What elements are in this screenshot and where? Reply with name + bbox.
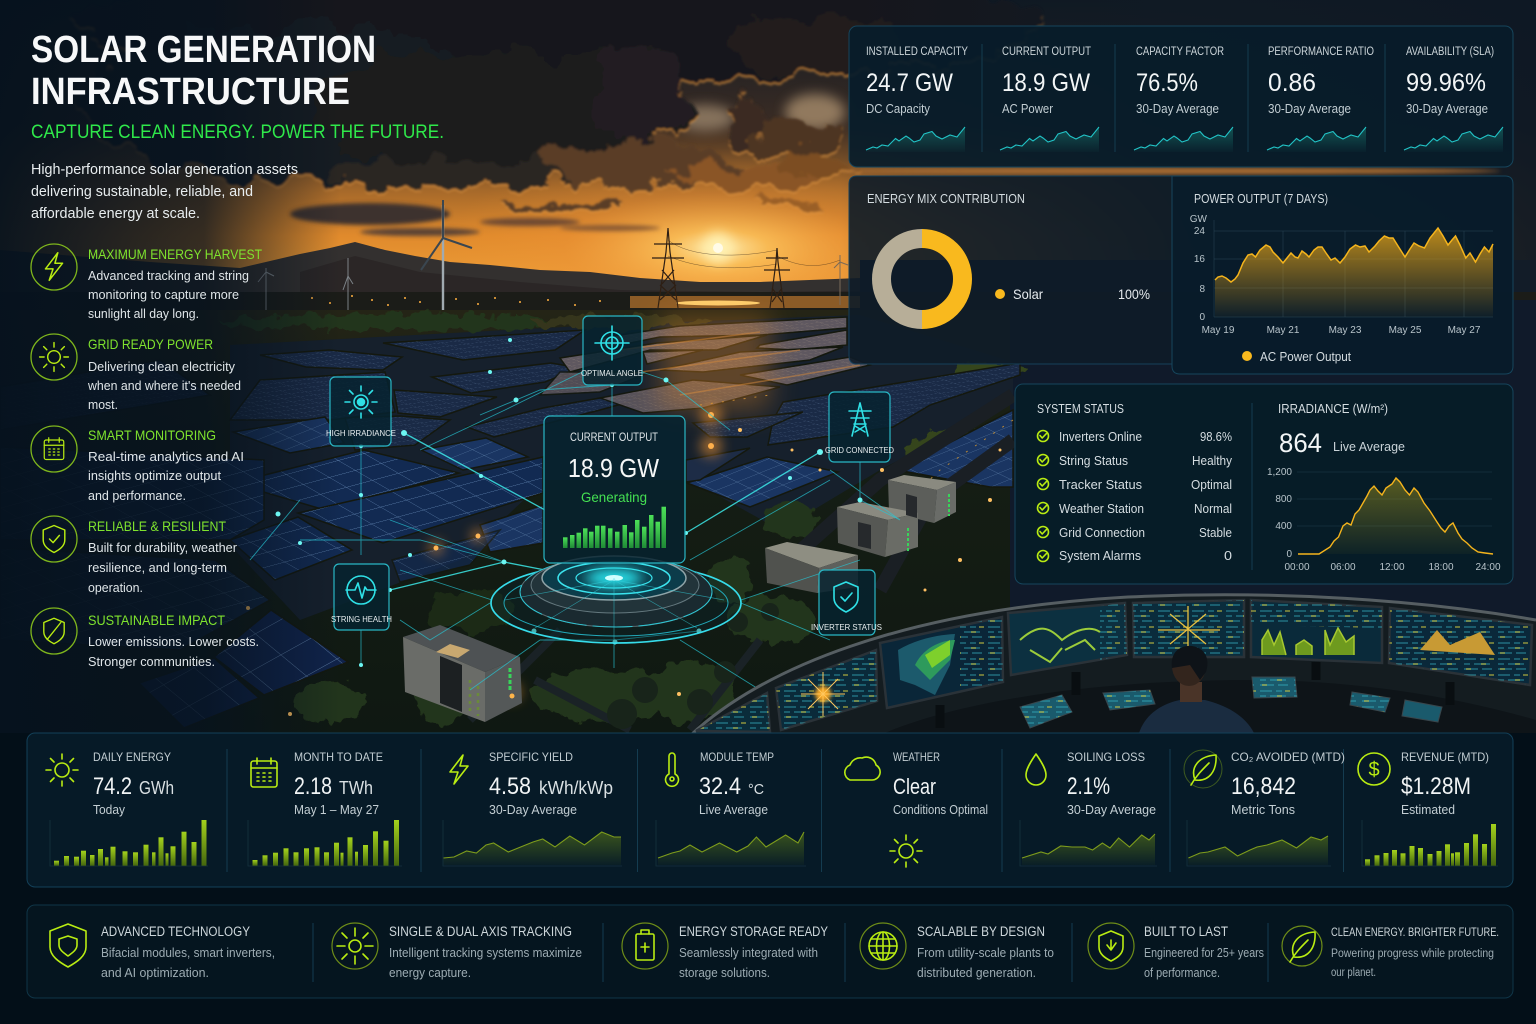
irradiance axis: 0	[1286, 549, 1292, 560]
kpi: revenue: Estimated	[1401, 803, 1455, 817]
desk tablets	[1020, 677, 1442, 728]
irradiance curve	[1298, 478, 1493, 554]
sun reflection	[620, 315, 860, 410]
status list: Grid Connection	[1059, 526, 1145, 540]
card: string health: STRING HEALTH	[331, 614, 392, 624]
donut chart	[882, 238, 962, 320]
inverter buildings: row	[765, 475, 956, 593]
kpi: current output: AC Power	[1002, 102, 1053, 116]
feature: energy storage ready: storage solutions.	[679, 966, 770, 980]
kpi: daily energy: DAILY ENERGY	[93, 750, 171, 764]
panel: KPI strip	[849, 26, 1513, 167]
intro text: High-performance solar generation assets	[31, 161, 298, 178]
item: maximum energy harvest: monitoring to capture more	[88, 287, 239, 302]
bottom background	[0, 733, 1536, 1024]
feature: advanced technology: and AI optimization.	[101, 966, 209, 980]
status list: 98.6%	[1200, 430, 1232, 444]
wind turbines	[258, 200, 848, 315]
card: current output: Generating	[581, 489, 647, 505]
solar field: sunlit centre	[540, 317, 870, 413]
operator	[1139, 646, 1254, 733]
horizon land with town lights	[0, 292, 1536, 316]
kpi: co2 avoided: CO₂ AVOIDED (MTD)	[1231, 750, 1345, 764]
kpi: specific yield: 30-Day Average	[489, 803, 577, 817]
ground	[0, 310, 1536, 735]
feature: built to last	[1088, 923, 1264, 980]
feature: scalable by design: SCALABLE BY DESIGN	[917, 924, 1045, 939]
item: reliable and resilient: operation.	[88, 580, 143, 595]
irradiance time labels: 18:00	[1428, 562, 1454, 573]
kpi: month to date: May 1 – May 27	[294, 803, 379, 817]
solar field: far left	[0, 330, 643, 470]
hologram platform	[491, 556, 741, 643]
low cloud bands	[290, 203, 660, 236]
panel: energy mix contribution	[849, 176, 1172, 364]
card: high irradiance: HIGH IRRADIANCE	[326, 428, 396, 438]
panel: system status and irradiance: Live Average	[1333, 439, 1405, 454]
kpi: co2 avoided: 16,842	[1231, 773, 1296, 800]
item: grid ready power: most.	[88, 397, 118, 412]
intro text: delivering sustainable, reliable, and	[31, 183, 253, 200]
mini bar chart	[563, 507, 666, 548]
feature: energy storage ready: ENERGY STORAGE READY	[679, 924, 828, 939]
date labels: May 23	[1329, 325, 1362, 336]
kpi: current output: 18.9 GW	[1002, 69, 1090, 97]
bright data links	[390, 433, 820, 590]
panel: system status and irradiance: SYSTEM STATUS	[1037, 402, 1124, 416]
item: maximum energy harvest: sunlight all day long.	[88, 306, 199, 321]
kpi: performance ratio: 30-Day Average	[1268, 102, 1351, 116]
title: SOLAR GENERATION	[31, 29, 376, 71]
card: current output	[544, 416, 685, 563]
irradiance time labels: 24:00	[1475, 562, 1501, 573]
panel: power output: POWER OUTPUT (7 DAYS)	[1194, 192, 1328, 206]
kpi: installed capacity: 24.7 GW	[866, 69, 953, 97]
item: maximum energy harvest: Advanced tracking and string	[88, 268, 249, 283]
feature: built to last: Engineered for 25+ years	[1144, 946, 1264, 960]
kpi: current output	[1000, 46, 1099, 152]
date labels: May 25	[1389, 325, 1422, 336]
kpi: performance ratio	[1267, 46, 1374, 152]
right sky shade	[840, 0, 1536, 310]
feature: advanced technology: ADVANCED TECHNOLOGY	[101, 924, 250, 939]
kpi: weather: Conditions Optimal	[893, 803, 988, 817]
kpi: installed capacity: INSTALLED CAPACITY	[866, 46, 968, 58]
card: inverter status	[811, 570, 882, 635]
irradiance axis: 1,200	[1267, 467, 1292, 478]
kpi: current output: CURRENT OUTPUT	[1002, 46, 1091, 58]
panel: system status and irradiance: IRRADIANCE (W/m²)	[1278, 402, 1388, 416]
feature: single and dual axis tracking	[332, 923, 582, 980]
item: grid ready power: when and where it's needed	[87, 378, 241, 393]
status list: Healthy	[1192, 454, 1233, 468]
kpi: capacity factor: CAPACITY FACTOR	[1136, 46, 1224, 58]
kpi: module temp: Live Average	[699, 803, 768, 817]
background: sunset scene	[0, 0, 1536, 740]
legend: solar	[995, 286, 1150, 302]
irradiance time labels: 06:00	[1330, 562, 1356, 573]
item: maximum energy harvest	[31, 244, 262, 321]
panel: system status and irradiance: 864	[1279, 428, 1322, 458]
legend: ac power output: AC Power Output	[1260, 350, 1351, 364]
feature: clean energy brighter future: our planet.	[1331, 967, 1376, 979]
area chart	[1215, 228, 1493, 317]
kpi: revenue	[1358, 750, 1498, 866]
card: optimal angle	[581, 316, 643, 385]
irradiance time labels: 12:00	[1379, 562, 1405, 573]
kpi: co2 avoided	[1184, 750, 1345, 866]
item: reliable and resilient: Built for durability, weather	[88, 540, 238, 555]
feature: single and dual axis tracking: SINGLE & DUAL AXIS TRACKING	[389, 924, 572, 939]
status list: Optimal	[1191, 478, 1232, 492]
monitors	[696, 600, 1532, 732]
kpi: revenue: $	[1368, 759, 1380, 781]
feature: energy storage ready	[622, 923, 828, 980]
kpi: daily energy	[46, 750, 208, 866]
status list: System Alarms	[1059, 549, 1141, 563]
item: reliable and resilient: resilience, and long-term	[88, 560, 227, 575]
kpi: month to date: MONTH TO DATE	[294, 750, 383, 764]
kpi: daily energy: 74.2	[93, 773, 132, 800]
field base tone	[230, 315, 1013, 620]
monitor content	[801, 606, 1495, 716]
panel: energy mix contribution: ENERGY MIX CONTRIBUTION	[867, 192, 1025, 206]
axis labels: 8	[1199, 284, 1205, 295]
storm clouds	[80, 0, 1040, 211]
left dark fade	[0, 0, 340, 740]
card: grid connected: GRID CONNECTED	[825, 445, 894, 455]
kpi: revenue: $1.28M	[1401, 773, 1471, 800]
kpi: performance ratio: PERFORMANCE RATIO	[1268, 46, 1374, 58]
status list: 0	[1224, 549, 1232, 563]
status list: String Status	[1059, 454, 1128, 468]
feature: single and dual axis tracking: Intelligent tracking systems maximize	[389, 946, 582, 960]
item: sustainable impact: SUSTAINABLE IMPACT	[88, 612, 225, 628]
item: smart monitoring: SMART MONITORING	[88, 427, 216, 443]
status list	[1038, 430, 1233, 563]
kpi: specific yield: 4.58	[489, 773, 531, 800]
panel: power output	[1172, 176, 1513, 374]
axis labels: 0	[1199, 312, 1205, 323]
feature list	[31, 244, 262, 669]
roads	[790, 395, 1013, 590]
sun glow	[438, 148, 998, 348]
kpi: capacity factor	[1134, 46, 1233, 152]
axis labels	[1190, 214, 1208, 323]
item: sustainable impact: Stronger communities.	[88, 654, 215, 669]
kpi: soiling loss: 2.1%	[1067, 773, 1110, 800]
monitor stands	[940, 660, 1450, 728]
feature: built to last: of performance.	[1144, 966, 1220, 980]
axis labels: 24	[1194, 226, 1205, 237]
legend: solar: 100%	[1118, 286, 1150, 302]
bright sky gaps	[675, 94, 845, 131]
legend: solar: Solar	[1013, 286, 1043, 302]
kpi: module temp	[656, 750, 806, 866]
irradiance axis: 800	[1275, 494, 1292, 505]
kpi: module temp: MODULE TEMP	[700, 750, 774, 764]
item: grid ready power: GRID READY POWER	[88, 336, 213, 352]
date labels: May 21	[1267, 325, 1300, 336]
feature: clean energy brighter future: CLEAN ENERGY. BRIGHTER FUTURE.	[1331, 927, 1499, 939]
kpi: month to date: 2.18	[294, 773, 332, 800]
card: current output: CURRENT OUTPUT	[570, 430, 659, 444]
card: inverter status: INVERTER STATUS	[811, 622, 882, 632]
card: string health	[331, 564, 392, 630]
kpi: weather: WEATHER	[893, 750, 940, 764]
item: smart monitoring: Real-time analytics and AI	[88, 449, 244, 464]
title	[31, 29, 376, 113]
network lines	[250, 372, 900, 690]
title: INFRASTRUCTURE	[31, 71, 350, 113]
solar field: near left	[0, 447, 543, 728]
item: reliable and resilient	[31, 516, 238, 595]
kpi: availability	[1404, 46, 1503, 152]
item: smart monitoring	[31, 426, 244, 503]
date labels	[1202, 325, 1481, 336]
feature: scalable by design: From utility-scale plants to	[917, 946, 1054, 960]
date labels: May 19	[1202, 325, 1235, 336]
kpi: specific yield	[443, 750, 622, 866]
kpi: soiling loss	[1020, 750, 1157, 866]
item: grid ready power	[31, 334, 241, 412]
network nodes	[276, 338, 862, 667]
irradiance time labels	[1284, 562, 1501, 573]
item: smart monitoring: and performance.	[88, 488, 186, 503]
kpi: module temp: 32.4	[699, 773, 741, 800]
axis labels: 16	[1194, 254, 1205, 265]
card: grid connected	[825, 392, 894, 462]
irradiance axis	[1267, 467, 1292, 560]
irradiance time labels: 00:00	[1284, 562, 1310, 573]
feature: advanced technology	[50, 924, 275, 980]
kpi: performance ratio: 0.86	[1268, 69, 1316, 97]
control room	[691, 595, 1536, 735]
kpi: month to date: TWh	[339, 778, 373, 798]
intro text	[31, 161, 298, 222]
desk	[691, 595, 1536, 735]
inverter building: front	[403, 625, 522, 722]
kpi: availability: 99.96%	[1406, 69, 1486, 97]
kpi: installed capacity: DC Capacity	[866, 102, 931, 116]
card: current output: 18.9 GW	[568, 453, 659, 483]
site lights	[246, 412, 1002, 716]
card: high irradiance	[326, 377, 396, 446]
feature: clean energy brighter future: Powering progress while protecting	[1331, 948, 1494, 960]
kpi: installed capacity	[866, 46, 968, 152]
kpi: soiling loss: 30-Day Average	[1067, 803, 1156, 817]
kpi: capacity factor: 30-Day Average	[1136, 102, 1219, 116]
item: sustainable impact	[31, 608, 259, 669]
kpi: daily energy: Today	[93, 803, 126, 817]
irradiance axis: 400	[1275, 521, 1292, 532]
feature: energy storage ready: Seamlessly integrated with	[679, 946, 818, 960]
kpi: specific yield: kWh/kWp	[539, 778, 613, 798]
kpi: co2 avoided: Metric Tons	[1231, 803, 1295, 817]
kpi: daily energy: GWh	[139, 778, 174, 798]
kpi: module temp: °C	[748, 781, 764, 798]
kpi: availability: 30-Day Average	[1406, 102, 1488, 116]
feature: built to last: BUILT TO LAST	[1144, 924, 1228, 939]
status list: Tracker Status	[1059, 478, 1142, 492]
card: optimal angle: OPTIMAL ANGLE	[581, 368, 643, 378]
feature: scalable by design	[860, 923, 1054, 980]
mountains	[0, 242, 1536, 315]
item: smart monitoring: insights optimize output	[88, 468, 221, 483]
feature: scalable by design: distributed generation.	[917, 966, 1036, 980]
feature: single and dual axis tracking: energy capture.	[389, 966, 471, 980]
item: reliable and resilient: RELIABLE & RESILIENT	[88, 518, 226, 534]
feature: advanced technology: Bifacial modules, smart inverters,	[101, 946, 275, 960]
status list: Weather Station	[1059, 502, 1144, 516]
trees	[607, 603, 779, 729]
kpi: month to date	[248, 750, 402, 866]
status list: Inverters Online	[1059, 430, 1142, 444]
item: grid ready power: Delivering clean electricity	[88, 359, 235, 374]
kpi: capacity factor: 76.5%	[1136, 69, 1198, 97]
panel: bottom capabilities strip	[27, 905, 1513, 998]
kpi: soiling loss: SOILING LOSS	[1067, 750, 1145, 764]
status list: Stable	[1199, 526, 1232, 540]
axis labels: GW	[1190, 214, 1208, 225]
transmission pylons	[652, 228, 840, 308]
panel: system status and irradiance	[1015, 384, 1513, 584]
kpi: availability: AVAILABILITY (SLA)	[1406, 46, 1494, 58]
feature: clean energy brighter future	[1282, 926, 1499, 979]
monitor data overlay	[696, 600, 1532, 732]
status list: Normal	[1194, 502, 1232, 516]
intro text: affordable energy at scale.	[31, 205, 200, 222]
greenery	[220, 314, 1026, 723]
kpi: weather: Clear	[893, 774, 936, 799]
date labels: May 27	[1448, 325, 1481, 336]
kpi: revenue: REVENUE (MTD)	[1401, 750, 1489, 764]
kpi: specific yield: SPECIFIC YIELD	[489, 750, 573, 764]
kpi: weather	[845, 750, 988, 867]
item: sustainable impact: Lower emissions. Lower costs.	[88, 634, 259, 649]
panel: bottom KPIs	[27, 733, 1513, 887]
solar field: right	[686, 363, 1020, 507]
sun disc	[703, 233, 733, 263]
item: maximum energy harvest: MAXIMUM ENERGY HARVEST	[88, 246, 262, 262]
tagline: CAPTURE CLEAN ENERGY. POWER THE FUTURE.	[31, 121, 444, 143]
